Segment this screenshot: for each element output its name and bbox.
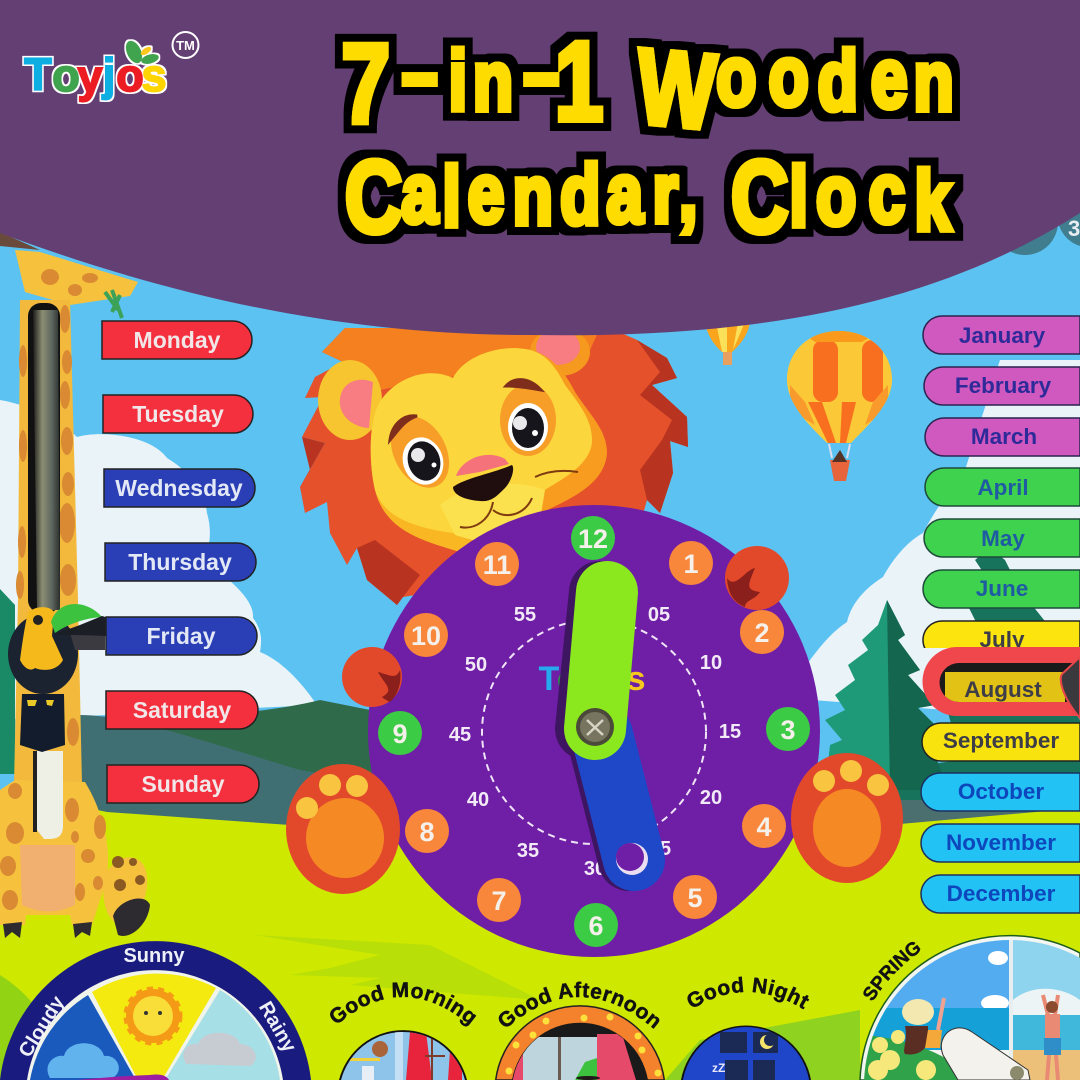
logo — [24, 38, 167, 102]
May — [924, 519, 1080, 557]
hour numbers: 1 — [683, 549, 699, 579]
Thursday — [105, 543, 256, 581]
minute numbers: 20 — [700, 787, 722, 809]
lion right ear inner — [536, 329, 580, 365]
title line 2: c — [869, 146, 905, 240]
sun icon — [126, 989, 180, 1043]
October — [921, 773, 1080, 811]
April — [925, 468, 1080, 506]
months of the year — [921, 316, 1080, 913]
sector: sunny — [92, 974, 216, 1080]
giraffe head — [15, 250, 138, 305]
lion right eye patch — [500, 384, 556, 456]
minute track — [482, 620, 706, 844]
November — [921, 824, 1080, 862]
board pegs behind header: 3 — [1068, 216, 1080, 241]
lion paw, lower right — [791, 753, 903, 883]
title line 2: d — [560, 148, 600, 242]
cloud icon, grey — [183, 1033, 256, 1066]
Monday — [102, 321, 252, 359]
title line 2: n — [513, 148, 553, 242]
title line 1: W — [634, 27, 719, 152]
Sunday: Sunday — [141, 771, 225, 797]
minute numbers: 25 — [649, 838, 671, 860]
July — [922, 620, 1080, 648]
Tuesday — [103, 395, 253, 433]
green hour hand — [595, 592, 607, 729]
logo wordmark: y — [77, 51, 103, 102]
background: hills — [80, 700, 1080, 830]
Tuesday: Tuesday — [132, 401, 224, 427]
minute numbers: 40 — [467, 789, 489, 811]
title line 2: a — [401, 146, 439, 240]
lion — [300, 328, 688, 605]
minute numbers: 10 — [700, 652, 722, 674]
giraffe body — [0, 780, 108, 925]
title line 1: 1 — [555, 20, 603, 145]
blue minute hand — [602, 735, 648, 875]
minute numbers: 55 — [514, 604, 536, 626]
giraffe neck slider slot — [28, 303, 63, 839]
Rainy label: Rainy — [254, 998, 301, 1057]
trademark badge: TM — [176, 38, 195, 53]
minute numbers: 15 — [719, 721, 741, 743]
lion paw, upper right — [725, 546, 789, 610]
title line 2: C — [731, 141, 788, 254]
June: June — [976, 576, 1028, 601]
hour numbers: 8 — [419, 817, 435, 847]
lion mane — [300, 328, 688, 605]
Good Morning label: Good Morning — [330, 982, 476, 1026]
hour numbers: 10 — [411, 621, 441, 651]
logo wordmark: o — [52, 50, 80, 101]
lion face — [371, 348, 592, 535]
pointer — [76, 1075, 169, 1080]
giraffe neck — [14, 300, 82, 785]
Good Night scene: zZ — [712, 1061, 725, 1075]
Cloudy label: Cloudy — [15, 992, 70, 1061]
Sunday — [107, 765, 259, 803]
slider handle — [1061, 657, 1080, 718]
March: March — [971, 424, 1037, 449]
minute numbers: 30 — [584, 858, 606, 880]
giraffe leaf — [105, 290, 122, 318]
title line 2: k — [915, 154, 951, 248]
lion left eye patch — [379, 406, 461, 498]
Friday: Friday — [146, 623, 216, 649]
giraffe — [0, 232, 150, 938]
giraffe chest — [20, 845, 75, 912]
title line 2: r — [653, 146, 678, 240]
Monday: Monday — [134, 327, 221, 353]
giraffe knee — [103, 857, 147, 925]
hour numbers: 3 — [780, 715, 796, 745]
hour numbers: 11 — [483, 550, 511, 580]
lion left ear — [318, 360, 382, 440]
logo wordmark: o — [116, 50, 144, 101]
giraffe hoof — [113, 899, 150, 936]
lion brows — [390, 380, 541, 440]
lion paw, left — [342, 647, 402, 707]
Saturday: Saturday — [133, 697, 231, 723]
January — [923, 316, 1080, 354]
giraffe feet — [3, 922, 92, 938]
Wednesday: Wednesday — [115, 475, 243, 501]
minute numbers: 50 — [465, 654, 487, 676]
header banner — [0, 0, 1080, 335]
title line 1: d — [818, 34, 858, 128]
seasons wheel — [860, 936, 1080, 1080]
toucan slider — [8, 604, 118, 752]
screw — [576, 708, 614, 746]
hour numbers: 2 — [754, 618, 770, 648]
August — [922, 647, 1080, 716]
May: May — [981, 526, 1025, 551]
title line 1: n — [473, 34, 513, 128]
title line 1: o — [716, 29, 756, 123]
background: clouds — [0, 360, 1080, 720]
September — [922, 723, 1080, 761]
Good Night label: Good Night — [687, 976, 810, 1010]
August: August — [964, 677, 1042, 702]
November: November — [946, 830, 1056, 855]
hour numbers: 7 — [491, 886, 507, 916]
clock logo: Toyjos — [538, 660, 646, 698]
December: December — [947, 881, 1056, 906]
Wednesday — [104, 469, 255, 507]
Saturday — [106, 691, 258, 729]
March — [925, 418, 1080, 456]
April: April — [977, 475, 1029, 500]
Good Afternoon label: Good Afternoon — [498, 982, 660, 1029]
lion face shadow — [371, 348, 607, 552]
December — [921, 875, 1080, 913]
clock face — [368, 505, 820, 957]
February — [924, 367, 1080, 405]
hot air balloon, large — [787, 331, 892, 481]
hour numbers: 5 — [687, 883, 703, 913]
minute numbers: 45 — [449, 724, 471, 746]
minute numbers — [449, 604, 741, 880]
weather wheel — [0, 941, 311, 1080]
lion paw, lower left — [286, 764, 400, 894]
January: January — [959, 323, 1046, 348]
days of the week — [102, 321, 259, 803]
February: February — [955, 373, 1052, 398]
title line 2: o — [816, 148, 856, 242]
giraffe ear — [0, 232, 40, 250]
hand shadows — [586, 592, 629, 860]
lion right ear — [530, 328, 590, 376]
title line 1: 7 — [342, 22, 390, 147]
October: October — [958, 779, 1044, 804]
hour numbers: 9 — [392, 719, 408, 749]
sector: cloudy — [30, 995, 136, 1080]
title line 1: n — [914, 34, 954, 128]
lion muzzle — [440, 484, 545, 545]
logo wordmark: T — [24, 49, 52, 100]
June — [923, 570, 1080, 608]
logo leaves — [123, 38, 160, 66]
trademark badge — [172, 32, 198, 58]
September: September — [943, 728, 1059, 753]
title line 2: l — [443, 150, 461, 244]
SPRING label: SPRING — [863, 942, 920, 1000]
title line 2: , — [679, 144, 697, 238]
title — [342, 0, 954, 254]
hour numbers: 4 — [756, 812, 772, 842]
lion left eye — [397, 432, 449, 490]
title line 1: e — [871, 31, 907, 125]
minute numbers: 35 — [517, 840, 539, 862]
lion mouth — [460, 471, 578, 528]
title line 2: C — [345, 141, 402, 254]
hour numbers: 6 — [588, 911, 604, 941]
July: July — [979, 627, 1025, 652]
lion left ear inner — [340, 380, 373, 428]
title line 1: i — [449, 34, 467, 128]
title line 2: a — [607, 146, 644, 240]
hot air balloon, small — [705, 322, 750, 365]
Sunny label: Sunny — [123, 945, 185, 967]
giraffe spots — [0, 269, 106, 910]
sector: rainy — [165, 990, 280, 1080]
logo wordmark: j — [102, 49, 115, 100]
background: grass ground — [0, 790, 1080, 1080]
logo wordmark: s — [141, 50, 167, 101]
board pegs behind header — [992, 189, 1080, 255]
title line 2: e — [468, 146, 504, 240]
lion nose — [453, 455, 513, 501]
hour numbers: 12 — [578, 524, 608, 554]
Friday — [106, 617, 257, 655]
Good Morning scene — [338, 1030, 468, 1080]
minute numbers: 05 — [648, 604, 670, 626]
Thursday: Thursday — [128, 549, 232, 575]
title line 1: o — [769, 29, 809, 123]
hour numbers — [378, 516, 810, 947]
Good Night scene — [680, 1024, 812, 1080]
clock hands — [576, 592, 648, 875]
title line 2: l — [790, 150, 808, 244]
lion right eye — [508, 403, 548, 451]
cloud icon, blue — [48, 1043, 119, 1078]
background: pine trees — [0, 548, 1080, 800]
Good Afternoon scene — [496, 1006, 664, 1080]
